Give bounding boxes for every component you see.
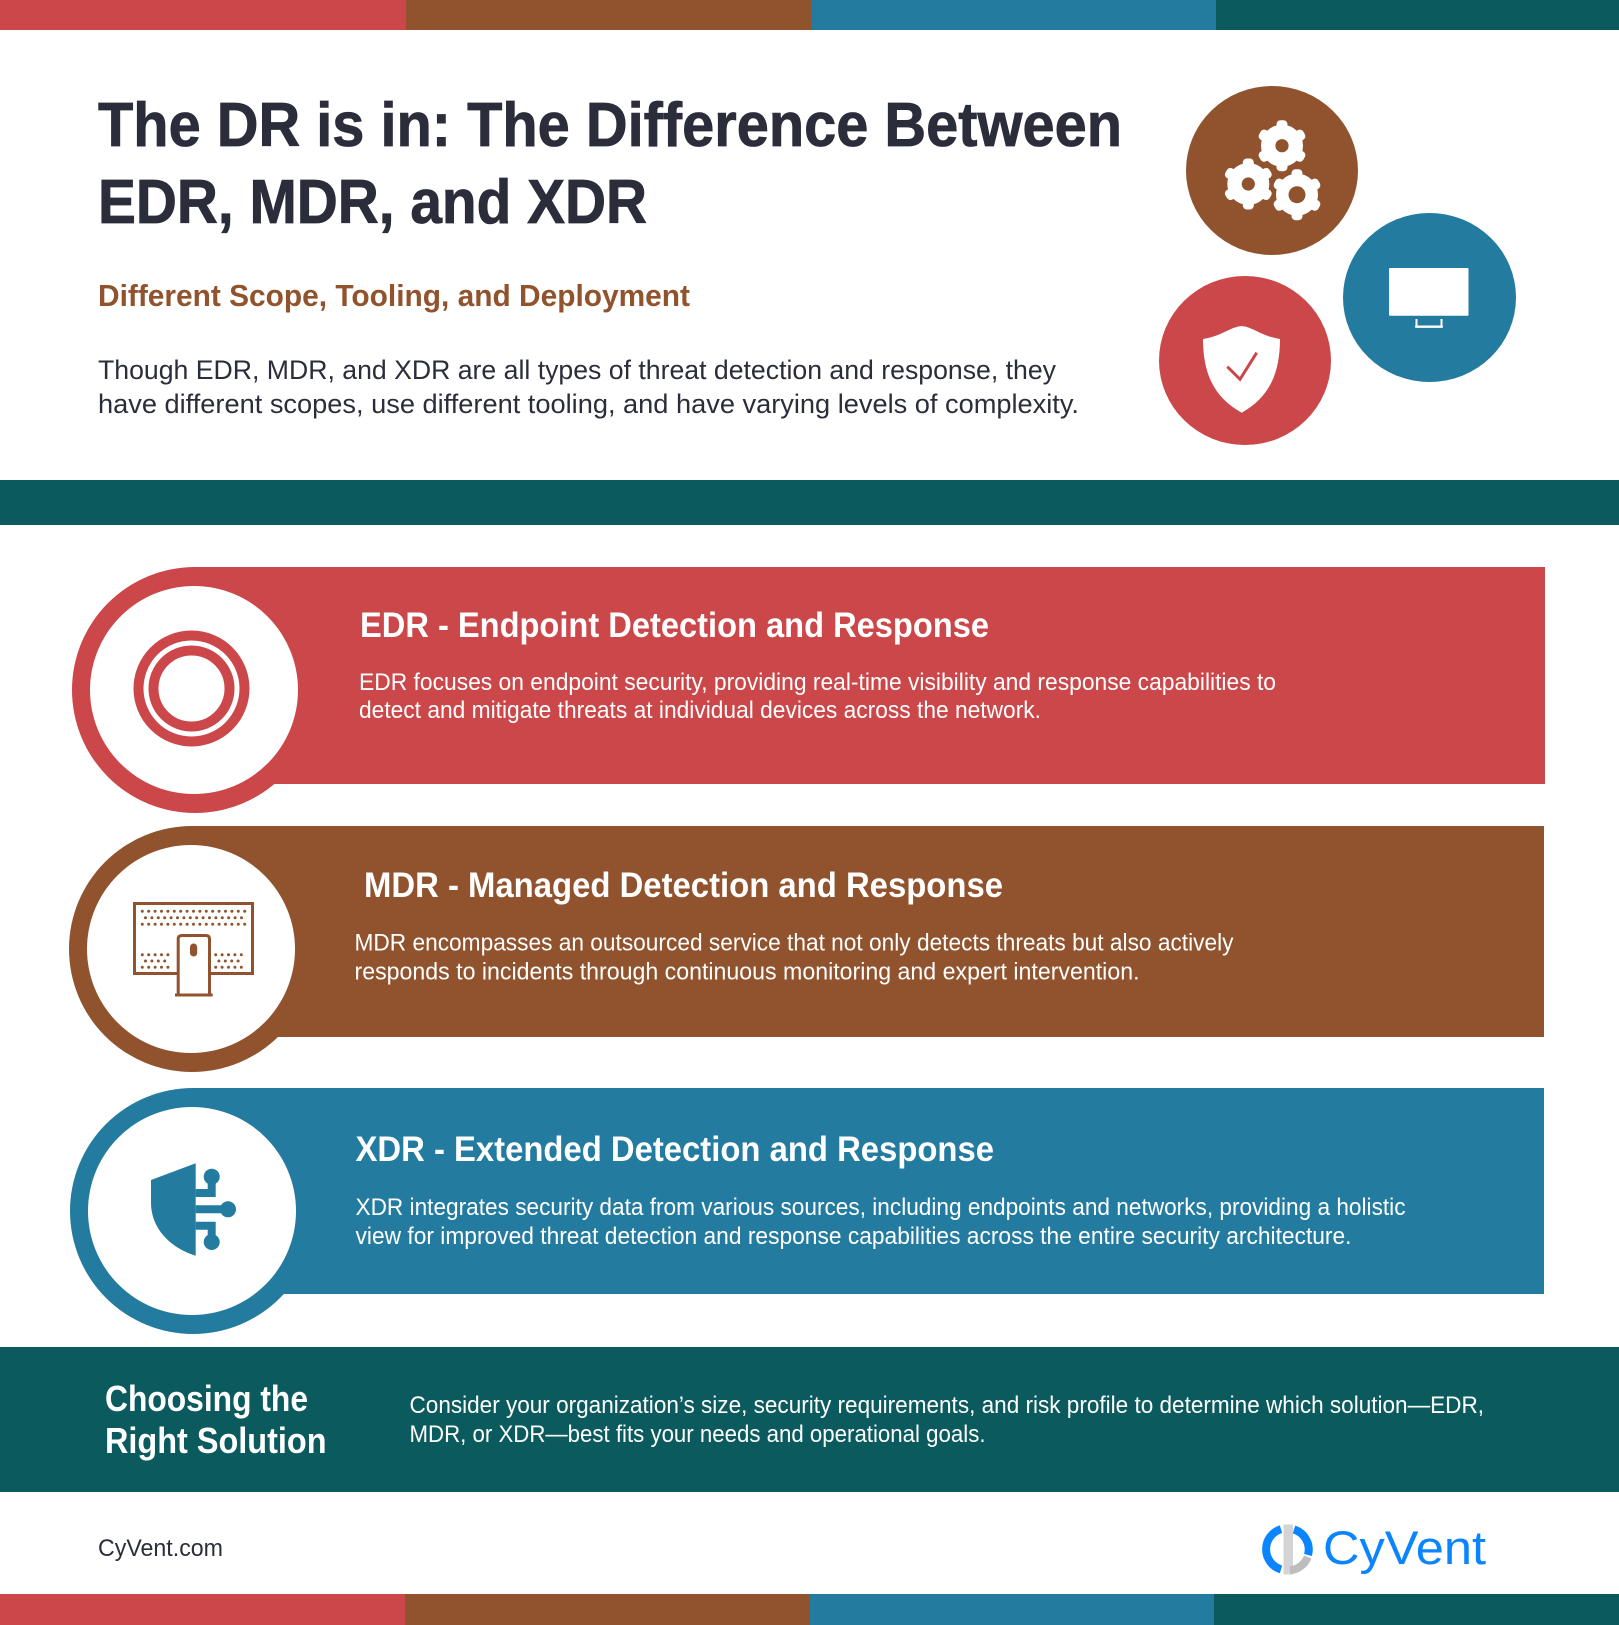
callout heading bbox=[105, 1378, 326, 1461]
title: The DR is in: The Difference Between bbox=[98, 91, 1122, 160]
icon: shield with check in red circle bbox=[1159, 276, 1331, 445]
panel: MDR bbox=[69, 826, 1544, 1072]
logo wordmark: CyVent bbox=[1323, 1521, 1486, 1574]
EDR description bbox=[359, 669, 1276, 724]
panel: choosing the right solution bbox=[0, 1347, 1619, 1492]
XDR description: view for improved threat detection and response capabilities across the entire security architecture. bbox=[356, 1223, 1352, 1250]
callout text: MDR, or XDR—best fits your needs and operational goals. bbox=[410, 1421, 986, 1448]
icon: concentric rings bbox=[138, 636, 244, 742]
intro text: Though EDR, MDR, and XDR are all types of threat detection and response, they bbox=[98, 355, 1056, 385]
XDR description bbox=[356, 1194, 1406, 1250]
website: CyVent.com bbox=[98, 1535, 223, 1562]
intro text bbox=[98, 355, 1079, 419]
intro text: have different scopes, use different tooling, and have varying levels of complexity. bbox=[98, 389, 1079, 419]
icon: monitor rear view bbox=[134, 904, 252, 996]
XDR heading: XDR - Extended Detection and Response bbox=[356, 1130, 994, 1169]
MDR heading: MDR - Managed Detection and Response bbox=[364, 866, 1003, 905]
title bbox=[98, 91, 1122, 237]
XDR description: XDR integrates security data from various sources, including endpoints and networks, providing a holistic bbox=[356, 1194, 1406, 1221]
EDR description: detect and mitigate threats at individual devices across the network. bbox=[359, 697, 1041, 724]
MDR description: responds to incidents through continuous monitoring and expert intervention. bbox=[354, 958, 1140, 986]
logo: CyVent bbox=[1266, 1521, 1486, 1574]
callout text bbox=[410, 1392, 1484, 1448]
callout heading: Right Solution bbox=[105, 1420, 326, 1461]
icon: shield with circuit bbox=[151, 1163, 236, 1256]
EDR description: EDR focuses on endpoint security, providing real-time visibility and response capabilities to bbox=[359, 669, 1276, 696]
EDR heading: EDR - Endpoint Detection and Response bbox=[360, 606, 989, 645]
MDR description bbox=[354, 930, 1234, 986]
panel: EDR bbox=[72, 567, 1545, 813]
callout heading: Choosing the bbox=[105, 1378, 308, 1419]
top colour strip bbox=[0, 0, 1619, 30]
logo mark bbox=[1266, 1524, 1309, 1574]
divider band bbox=[0, 480, 1619, 525]
icon: gears in brown circle bbox=[1186, 86, 1358, 255]
MDR description: MDR encompasses an outsourced service that not only detects threats but also actively bbox=[354, 930, 1234, 956]
callout text: Consider your organization’s size, security requirements, and risk profile to determine which solution—EDR, bbox=[410, 1392, 1484, 1419]
icon: monitor in blue circle bbox=[1343, 213, 1516, 382]
bottom colour strip bbox=[0, 1594, 1619, 1625]
subtitle: Different Scope, Tooling, and Deployment bbox=[98, 278, 690, 313]
panel: XDR bbox=[70, 1088, 1544, 1334]
title: EDR, MDR, and XDR bbox=[98, 168, 647, 237]
